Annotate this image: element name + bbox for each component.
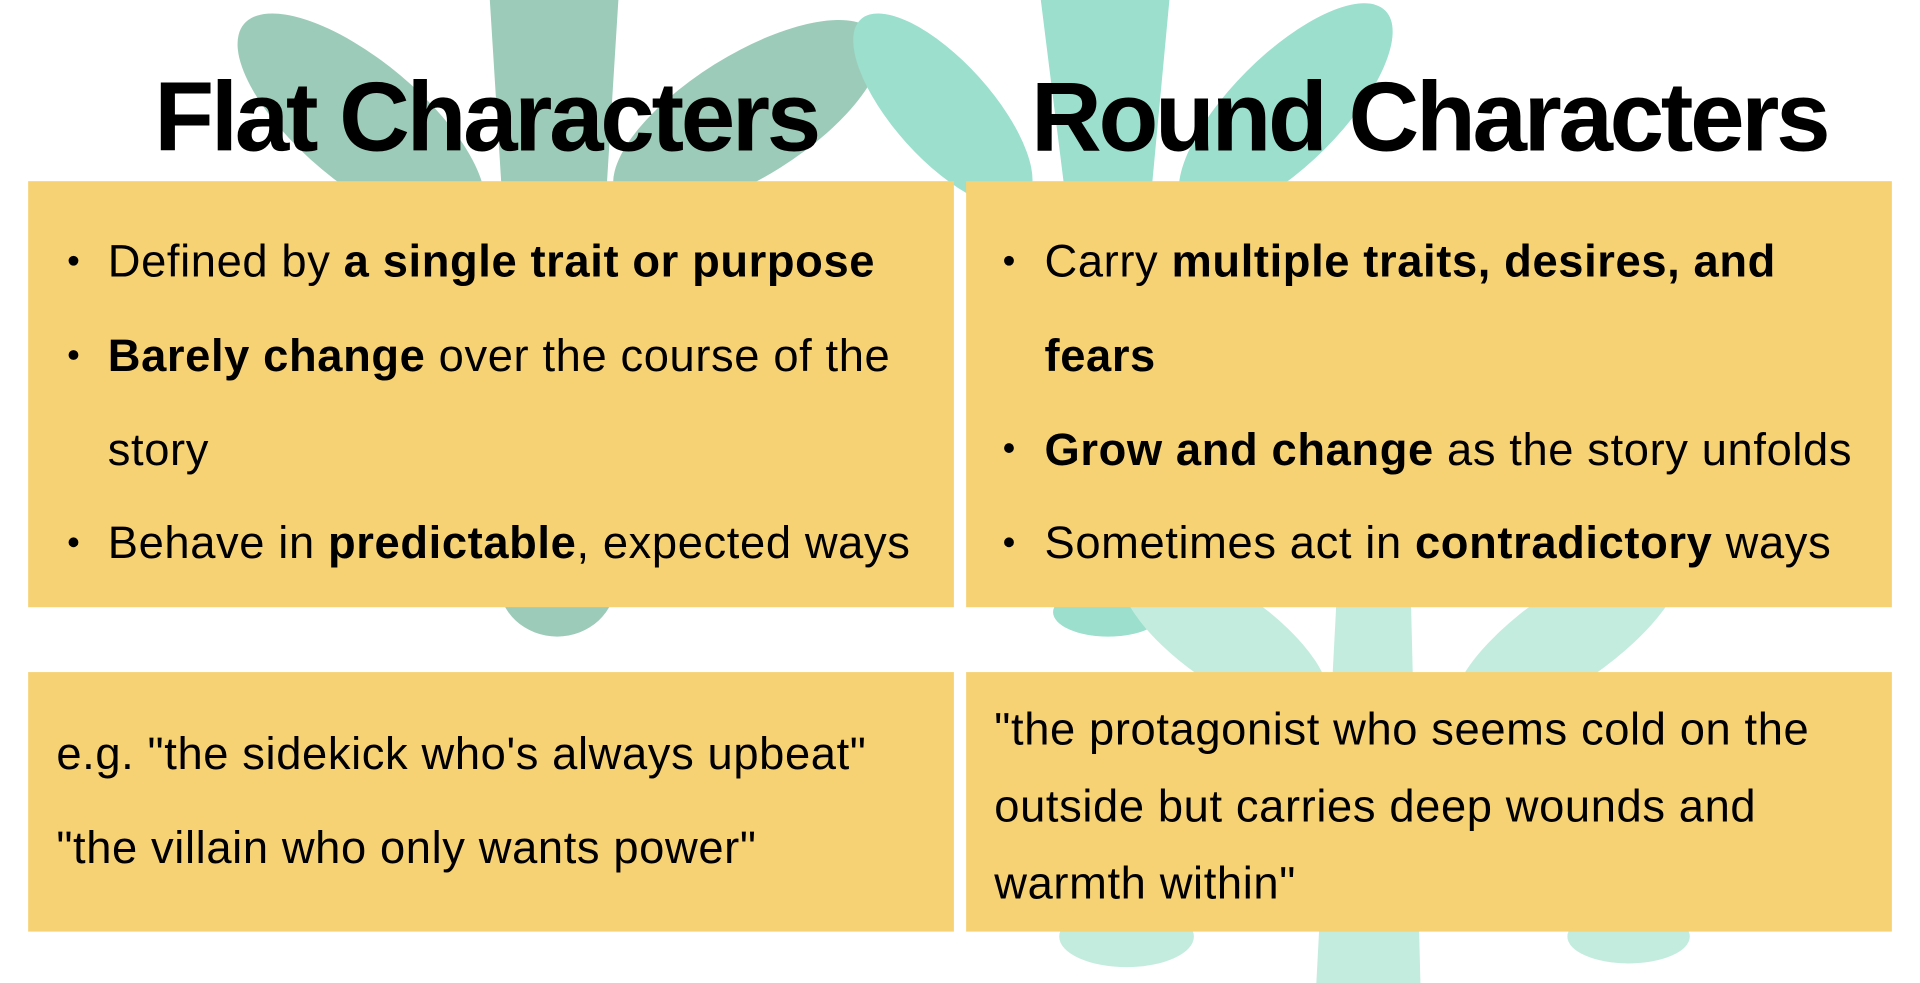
title: Flat Characters: Flat Characters	[154, 62, 818, 171]
panel: round example: "the protagonist who seems cold on the	[994, 704, 1809, 754]
panel: round traits: Sometimes act in contradictory ways	[1044, 518, 1831, 568]
panel: round example	[966, 672, 1892, 932]
panel: flat examples: "the villain who only wants power"	[56, 823, 757, 873]
panel: round example: warmth within"	[994, 858, 1296, 908]
panel: flat traits: story	[108, 425, 209, 475]
panel: round traits: Carry multiple traits, desires, and	[1044, 236, 1776, 286]
panel: flat traits	[28, 181, 954, 607]
title: Round Characters: Round Characters	[1031, 62, 1827, 171]
panel: flat examples: e.g. "the sidekick who's always upbeat"	[56, 728, 866, 779]
panel: round traits	[966, 181, 1892, 607]
panel: flat traits: Barely change over the course of the	[108, 331, 890, 381]
panel: flat traits: Defined by a single trait or purpose	[108, 236, 875, 286]
panel: flat traits: Behave in predictable, expected ways	[108, 518, 911, 568]
panel: round traits: Grow and change as the story unfolds	[1044, 425, 1852, 475]
panel: round traits: fears	[1044, 331, 1156, 381]
panel: round example: outside but carries deep wounds and	[994, 781, 1756, 831]
panel: flat examples	[28, 672, 954, 932]
